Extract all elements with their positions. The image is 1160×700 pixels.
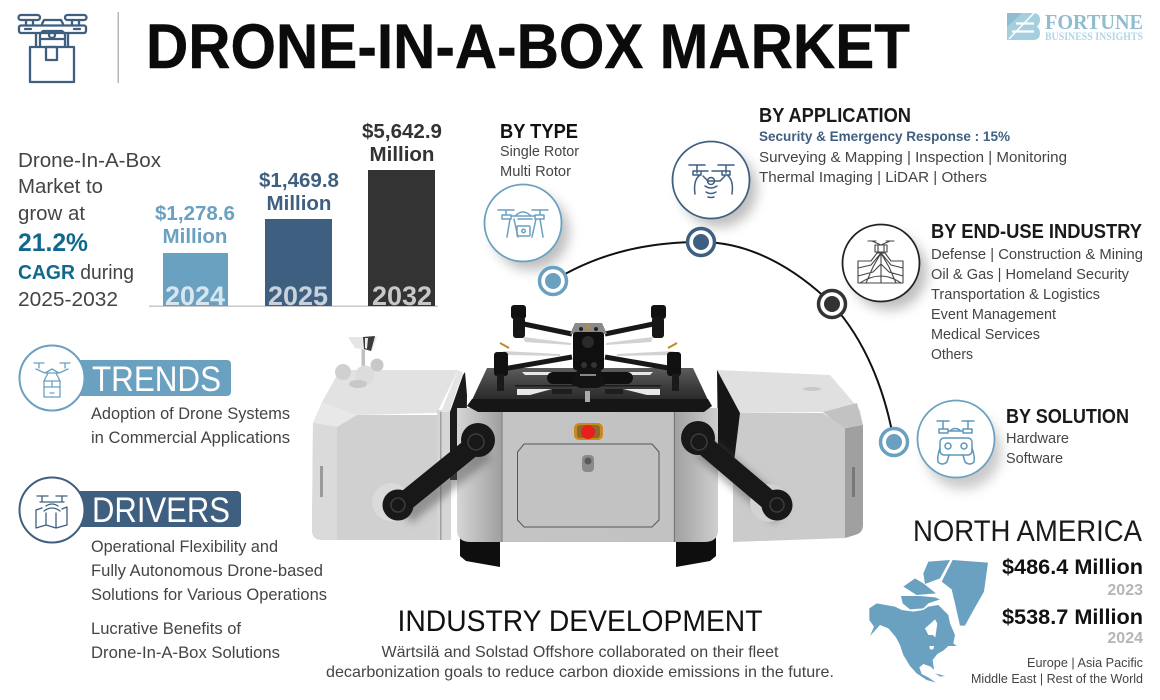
bar 2025: Million [267,192,331,215]
panel: by type [484,121,579,294]
trends label: TRENDS [92,360,221,399]
by application text: Thermal Imaging | LiDAR | Others [759,169,987,186]
drivers text: Solutions for Various Operations [91,585,327,604]
by application text: Surveying & Mapping | Inspection | Monitoring [759,149,1067,166]
drivers label: DRIVERS [92,491,230,530]
north america text: Europe | Asia Pacific [1027,656,1143,670]
logo: Fortune Business Insights [1007,10,1143,43]
node: by type [540,268,566,294]
north america text: NORTH AMERICA [913,515,1142,548]
by application text: BY APPLICATION [759,105,911,127]
icon: surveying drone [672,142,757,227]
north america text: Middle East | Rest of the World [971,672,1143,686]
north america text [913,515,1143,686]
icon: drone scanning terrain [842,224,927,310]
drivers text: Drone-In-A-Box Solutions [91,643,280,662]
by solution text: Software [1006,450,1063,467]
header divider [118,12,119,83]
by application text [759,105,1067,186]
icon: north america map [869,560,988,683]
bar 2024: $1,278.6 [155,202,235,225]
by solution text [1006,406,1129,467]
by type text [500,121,579,180]
bar 2032: 2032 [372,281,432,311]
by application text: Security & Emergency Response : 15% [759,128,1011,144]
bar 2032: $5,642.9 [362,120,442,143]
panel: by application [672,105,1067,256]
left arm [372,423,495,521]
bar 2025: 2025 [268,281,328,311]
market growth text: 21.2% [18,229,88,257]
docking platform [467,368,712,412]
market growth text: grow at [18,203,85,225]
emergency stop button [574,423,603,440]
by end-use text [931,221,1143,363]
by end-use text: Others [931,346,973,363]
icon: payload drone [484,184,569,270]
trends text: in Commercial Applications [91,428,290,447]
north america text: $486.4 Million [1002,556,1143,579]
icon: delivery drone [20,346,84,410]
bar 2025: $1,469.8 [259,169,339,192]
bar 2024: 2024 [165,281,225,311]
market growth text: Drone-In-A-Box [18,150,161,172]
title: DRONE-IN-A-BOX MARKET [146,12,910,82]
node: by solution [880,428,908,456]
header icon: drone carrying box [18,15,86,82]
by end-use text: Medical Services [931,326,1040,343]
connecting arc [553,242,894,442]
by solution text: BY SOLUTION [1006,406,1129,428]
by end-use text: Transportation & Logistics [931,286,1100,303]
icon: drone controller [918,400,1001,489]
industry development heading: INDUSTRY DEVELOPMENT [398,605,762,638]
market growth text: CAGR during [18,262,134,284]
panel: drivers [20,478,327,662]
industry development text [326,644,834,681]
bar 2032 [362,120,442,311]
right arm [681,421,792,522]
drivers text: Operational Flexibility and [91,537,278,556]
drone-in-a-box station illustration [312,305,863,567]
drivers text [91,537,327,662]
bar 2025 [259,169,339,311]
bar 2024: Million [163,225,227,248]
key lock [582,455,594,472]
panel: north america [869,515,1143,686]
by type text: Single Rotor [500,144,579,160]
by end-use text: Event Management [931,306,1057,323]
drivers text: Fully Autonomous Drone-based [91,561,323,580]
panel: by solution [880,400,1129,489]
by solution text: Hardware [1006,430,1069,447]
industry development text: Wärtsilä and Solstad Offshore collaborated on their fleet [382,644,779,661]
node: by application [688,228,714,256]
central cabinet [457,408,718,542]
by type text: Multi Rotor [500,164,571,180]
industry development text: decarbonization goals to reduce carbon dioxide emissions in the future. [326,664,834,681]
trends text [91,404,290,447]
panel: trends [20,346,290,447]
logo: Fortune Business Insights: BUSINESS INSIGHTS [1045,31,1143,43]
icon: drone over map [20,478,84,542]
left housing [312,370,467,540]
panel: by end-use industry [818,221,1143,363]
panel: industry development [326,605,834,681]
market growth text [18,150,161,311]
drone [494,305,681,391]
north america text: $538.7 Million [1002,606,1143,629]
by end-use text: Oil & Gas | Homeland Security [931,266,1129,283]
logo: Fortune Business Insights: FORTUNE [1045,10,1143,34]
market growth text: 2025-2032 [18,289,118,311]
north america text: 2023 [1107,582,1143,599]
right housing [717,370,863,542]
trends text: Adoption of Drone Systems [91,404,290,423]
anemometer and camera [335,336,384,388]
bar 2024 [155,202,235,311]
bar chart: market size [149,120,442,311]
node: by end-use [818,290,846,318]
market growth text: Market to [18,176,103,198]
by end-use text: Defense | Construction & Mining [931,246,1143,263]
north america text: 2024 [1107,630,1143,647]
by end-use text: BY END-USE INDUSTRY [931,221,1143,243]
bar 2032: Million [370,143,434,166]
drivers text: Lucrative Benefits of [91,619,241,638]
base legs [460,537,716,567]
by type text: BY TYPE [500,121,578,143]
